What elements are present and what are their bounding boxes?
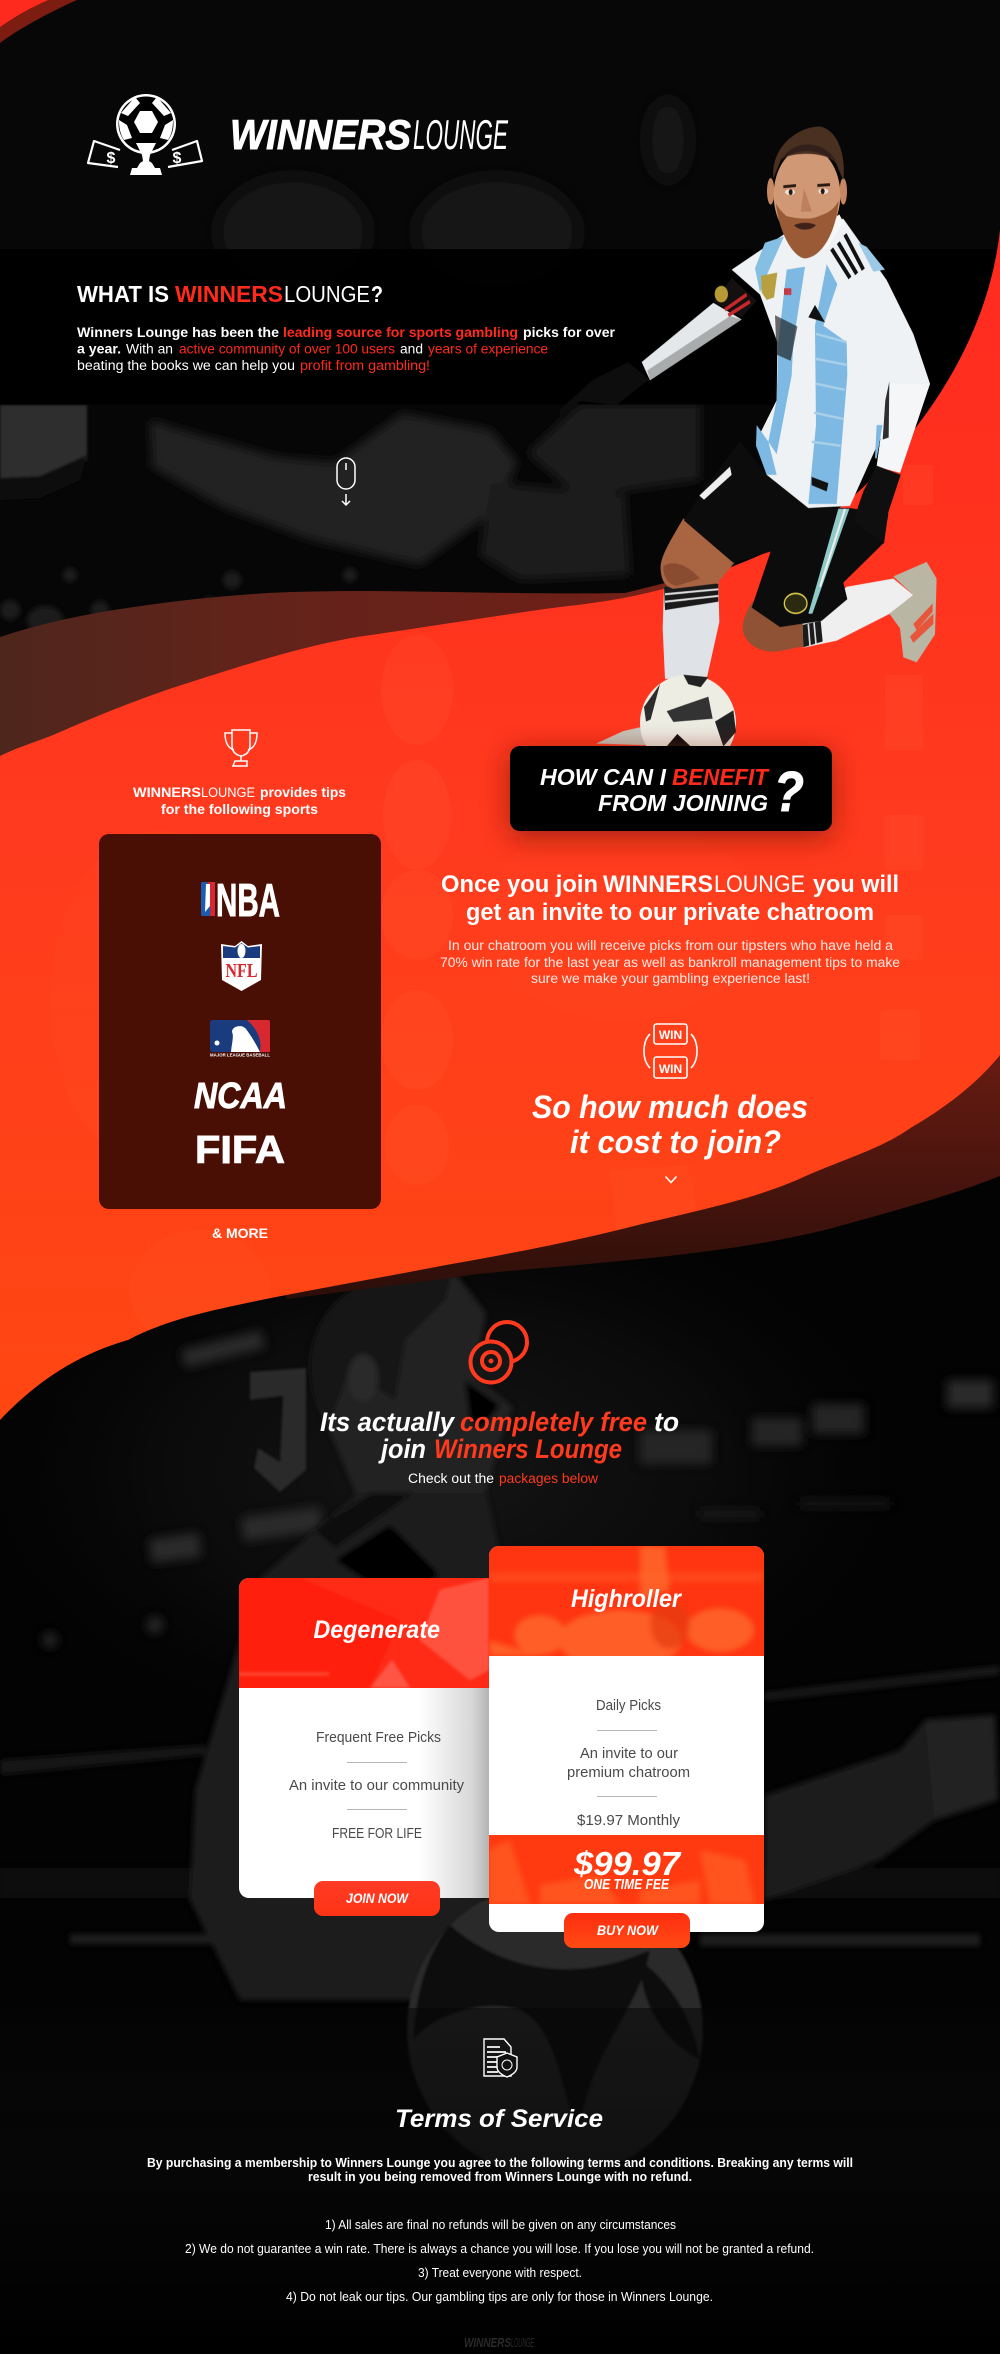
callout: how can I benefit: HOW CAN I	[540, 764, 667, 790]
terms intro	[147, 2155, 853, 2184]
heading: WINNERS	[175, 281, 283, 307]
icon: trophy ball with cash	[88, 94, 202, 175]
subheading	[441, 871, 899, 926]
card header	[239, 1578, 489, 1688]
packages caption	[408, 1471, 598, 1486]
intro paragraph: profit from gambling!	[300, 358, 430, 373]
callout: how can I benefit: ?	[774, 760, 804, 824]
feature list: An invite to our community	[289, 1778, 465, 1794]
forward arm	[642, 303, 742, 380]
section: what is winnerslounge	[77, 281, 616, 373]
dark league panel	[99, 834, 381, 1209]
subheading: WINNERS	[603, 871, 713, 898]
background photo: football	[407, 1882, 703, 2178]
player figure	[560, 127, 937, 771]
background photo: player in black section	[0, 1200, 1000, 2000]
terms intro: result in you being removed from Winners Lounge with no refund.	[308, 2169, 692, 2184]
heading: completely free: Winners Lounge	[434, 1434, 622, 1464]
card: Highroller	[489, 1546, 764, 1932]
feature list	[567, 1698, 690, 1829]
heading: completely free	[320, 1407, 679, 1464]
background photo: top players	[0, 94, 704, 628]
top-left corner wave	[0, 0, 77, 43]
collar	[790, 214, 843, 249]
rear leg skin	[743, 601, 806, 652]
intro paragraph: active community of over 100 users	[179, 342, 395, 356]
button: buy now	[564, 1913, 690, 1948]
MLB logo: MAJOR LEAGUE BASEBALL	[210, 1052, 270, 1058]
more label: & MORE	[212, 1226, 268, 1242]
heading: how much does it cost: it cost to join?	[570, 1124, 781, 1160]
packages caption: Check out the	[408, 1471, 494, 1486]
intro paragraph: a year.	[77, 342, 121, 356]
head	[767, 127, 847, 258]
rear boot	[889, 562, 937, 662]
price band: $99.97	[573, 1845, 682, 1882]
section: chatroom invite	[440, 871, 900, 986]
icon: scroll mouse	[337, 458, 355, 505]
callout: how can I benefit	[510, 746, 832, 837]
terms intro: By purchasing a membership to Winners Lounge you agree to the following terms and conditions. Breaking any terms will	[147, 2155, 853, 2170]
terms list: 4) Do not leak our tips. Our gambling tips are only for those in Winners Lounge.	[286, 2289, 713, 2304]
intro paragraph: leading source for sports gambling	[283, 325, 518, 340]
heading: how much does it cost: So how much does	[532, 1089, 808, 1125]
wave: dark translucent band	[0, 555, 1000, 1299]
NFL logo: NFL	[226, 960, 258, 982]
callout: how can I benefit: FROM JOINING	[598, 790, 768, 816]
subheading: LOUNGE	[714, 871, 805, 898]
blue stripes	[755, 236, 784, 292]
icon: trophy	[225, 730, 257, 766]
icon: terms document	[484, 2039, 517, 2077]
wave: main red shape	[0, 230, 1000, 1420]
feature list: FREE FOR LIFE	[332, 1826, 422, 1842]
heading: completely free: to	[654, 1407, 679, 1437]
dark grass overlay	[0, 2008, 1000, 2354]
intro paragraph: and	[400, 342, 423, 356]
icon: target rings	[470, 1322, 527, 1382]
captain armband	[713, 278, 757, 317]
icon: trophy ball with cash: $	[173, 150, 182, 167]
terms list: 2) We do not guarantee a win rate. There is always a chance you will lose. If you lose you will not be granted a refund.	[185, 2241, 814, 2256]
card: Degenerate	[239, 1578, 489, 1898]
feature list	[289, 1730, 465, 1842]
heading: completely free: completely free	[460, 1407, 647, 1437]
section: sports panel	[99, 730, 381, 1242]
far boot	[596, 727, 645, 745]
icon: win swap: WIN	[659, 1062, 682, 1076]
body text: sure we make your gambling experience last!	[531, 971, 810, 986]
terms list: 1) All sales are final no refunds will be given on any circumstances	[325, 2217, 676, 2232]
price band: ONE TIME FEE	[584, 1877, 670, 1893]
price band	[489, 1835, 764, 1904]
intro paragraph: With an	[126, 342, 173, 356]
shorts	[684, 441, 888, 627]
body	[190, 1493, 510, 2000]
icon: win swap: WIN	[659, 1028, 682, 1042]
intro paragraph	[77, 325, 616, 373]
dark info band	[0, 249, 1000, 404]
panel caption: LOUNGE	[201, 785, 255, 801]
MLB logo	[210, 1020, 270, 1058]
heading: how much does it cost	[532, 1089, 808, 1160]
intro paragraph: Winners Lounge has been the	[77, 325, 280, 340]
footer logo: WINNERS	[464, 2336, 512, 2350]
panel caption: for the following sports	[161, 802, 318, 818]
body text: In our chatroom you will receive picks from our tipsters who have held a	[448, 938, 893, 953]
panel caption: WINNERS	[133, 785, 201, 801]
intro paragraph: beating the books we can help you	[77, 358, 295, 373]
intro paragraph: picks for over	[523, 325, 616, 340]
button: join now	[314, 1881, 440, 1916]
card title: Highroller	[571, 1585, 682, 1613]
heading: LOUNGE	[284, 281, 370, 307]
feature list: $19.97 Monthly	[577, 1813, 681, 1829]
wordmark: LOUNGE	[413, 111, 509, 158]
card header	[489, 1546, 764, 1656]
heading	[77, 281, 383, 307]
ghost photo shapes on the red wave	[162, 1306, 232, 1326]
terms list	[185, 2217, 814, 2304]
jersey	[732, 219, 930, 508]
feature list: Daily Picks	[596, 1698, 661, 1714]
subheading: you will	[813, 871, 899, 898]
packages caption: packages below	[499, 1471, 598, 1486]
rear sock	[803, 578, 913, 648]
heading: WHAT IS	[77, 281, 169, 307]
subheading: get an invite to our private chatroom	[466, 899, 874, 926]
card title: Degenerate	[314, 1616, 440, 1644]
panel caption: provides tips	[260, 785, 346, 801]
feature list: Frequent Free Picks	[316, 1730, 441, 1746]
panel caption	[133, 785, 346, 818]
icon: win swap	[644, 1024, 697, 1078]
heading: completely free: join	[378, 1434, 426, 1464]
feature list: premium chatroom	[567, 1765, 690, 1781]
NFL logo	[221, 941, 262, 991]
standing sock	[663, 583, 719, 679]
terms heading: Terms of Service	[395, 2105, 603, 2133]
FIFA logo: FIFA	[195, 1129, 285, 1172]
heading: ?	[371, 281, 383, 307]
body text	[440, 938, 900, 986]
icon: trophy ball with cash: $	[107, 150, 116, 167]
body text: 70% win rate for the last year as well as bankroll management tips to make	[440, 955, 900, 970]
right glove	[853, 466, 901, 544]
sleeve shading	[877, 384, 930, 473]
subheading: Once you join	[441, 871, 598, 898]
intro paragraph: years of experience	[428, 342, 548, 356]
far arm	[765, 1715, 998, 1900]
logo	[88, 94, 509, 175]
standing thigh	[661, 518, 735, 589]
NBA logo	[201, 874, 280, 926]
NCAA logo: NCAA	[194, 1075, 287, 1116]
shoulder stripes	[832, 234, 863, 278]
wordmark: WINNERS	[230, 111, 411, 158]
feature list: An invite to our	[580, 1746, 678, 1762]
NBA logo: NBA	[216, 874, 280, 926]
button: join now: JOIN NOW	[346, 1891, 409, 1906]
callout: how can I benefit: BENEFIT	[672, 764, 770, 790]
button: buy now: BUY NOW	[597, 1923, 659, 1938]
crest and marks	[761, 273, 777, 300]
Juventus J crest	[250, 1368, 306, 1492]
ball	[640, 675, 736, 771]
text: LOUNGE	[511, 2336, 534, 2350]
terms list: 3) Treat everyone with respect.	[418, 2265, 582, 2280]
icon: chevron	[666, 1176, 676, 1182]
heading: completely free: Its actually	[320, 1407, 456, 1437]
head	[310, 1270, 513, 1493]
